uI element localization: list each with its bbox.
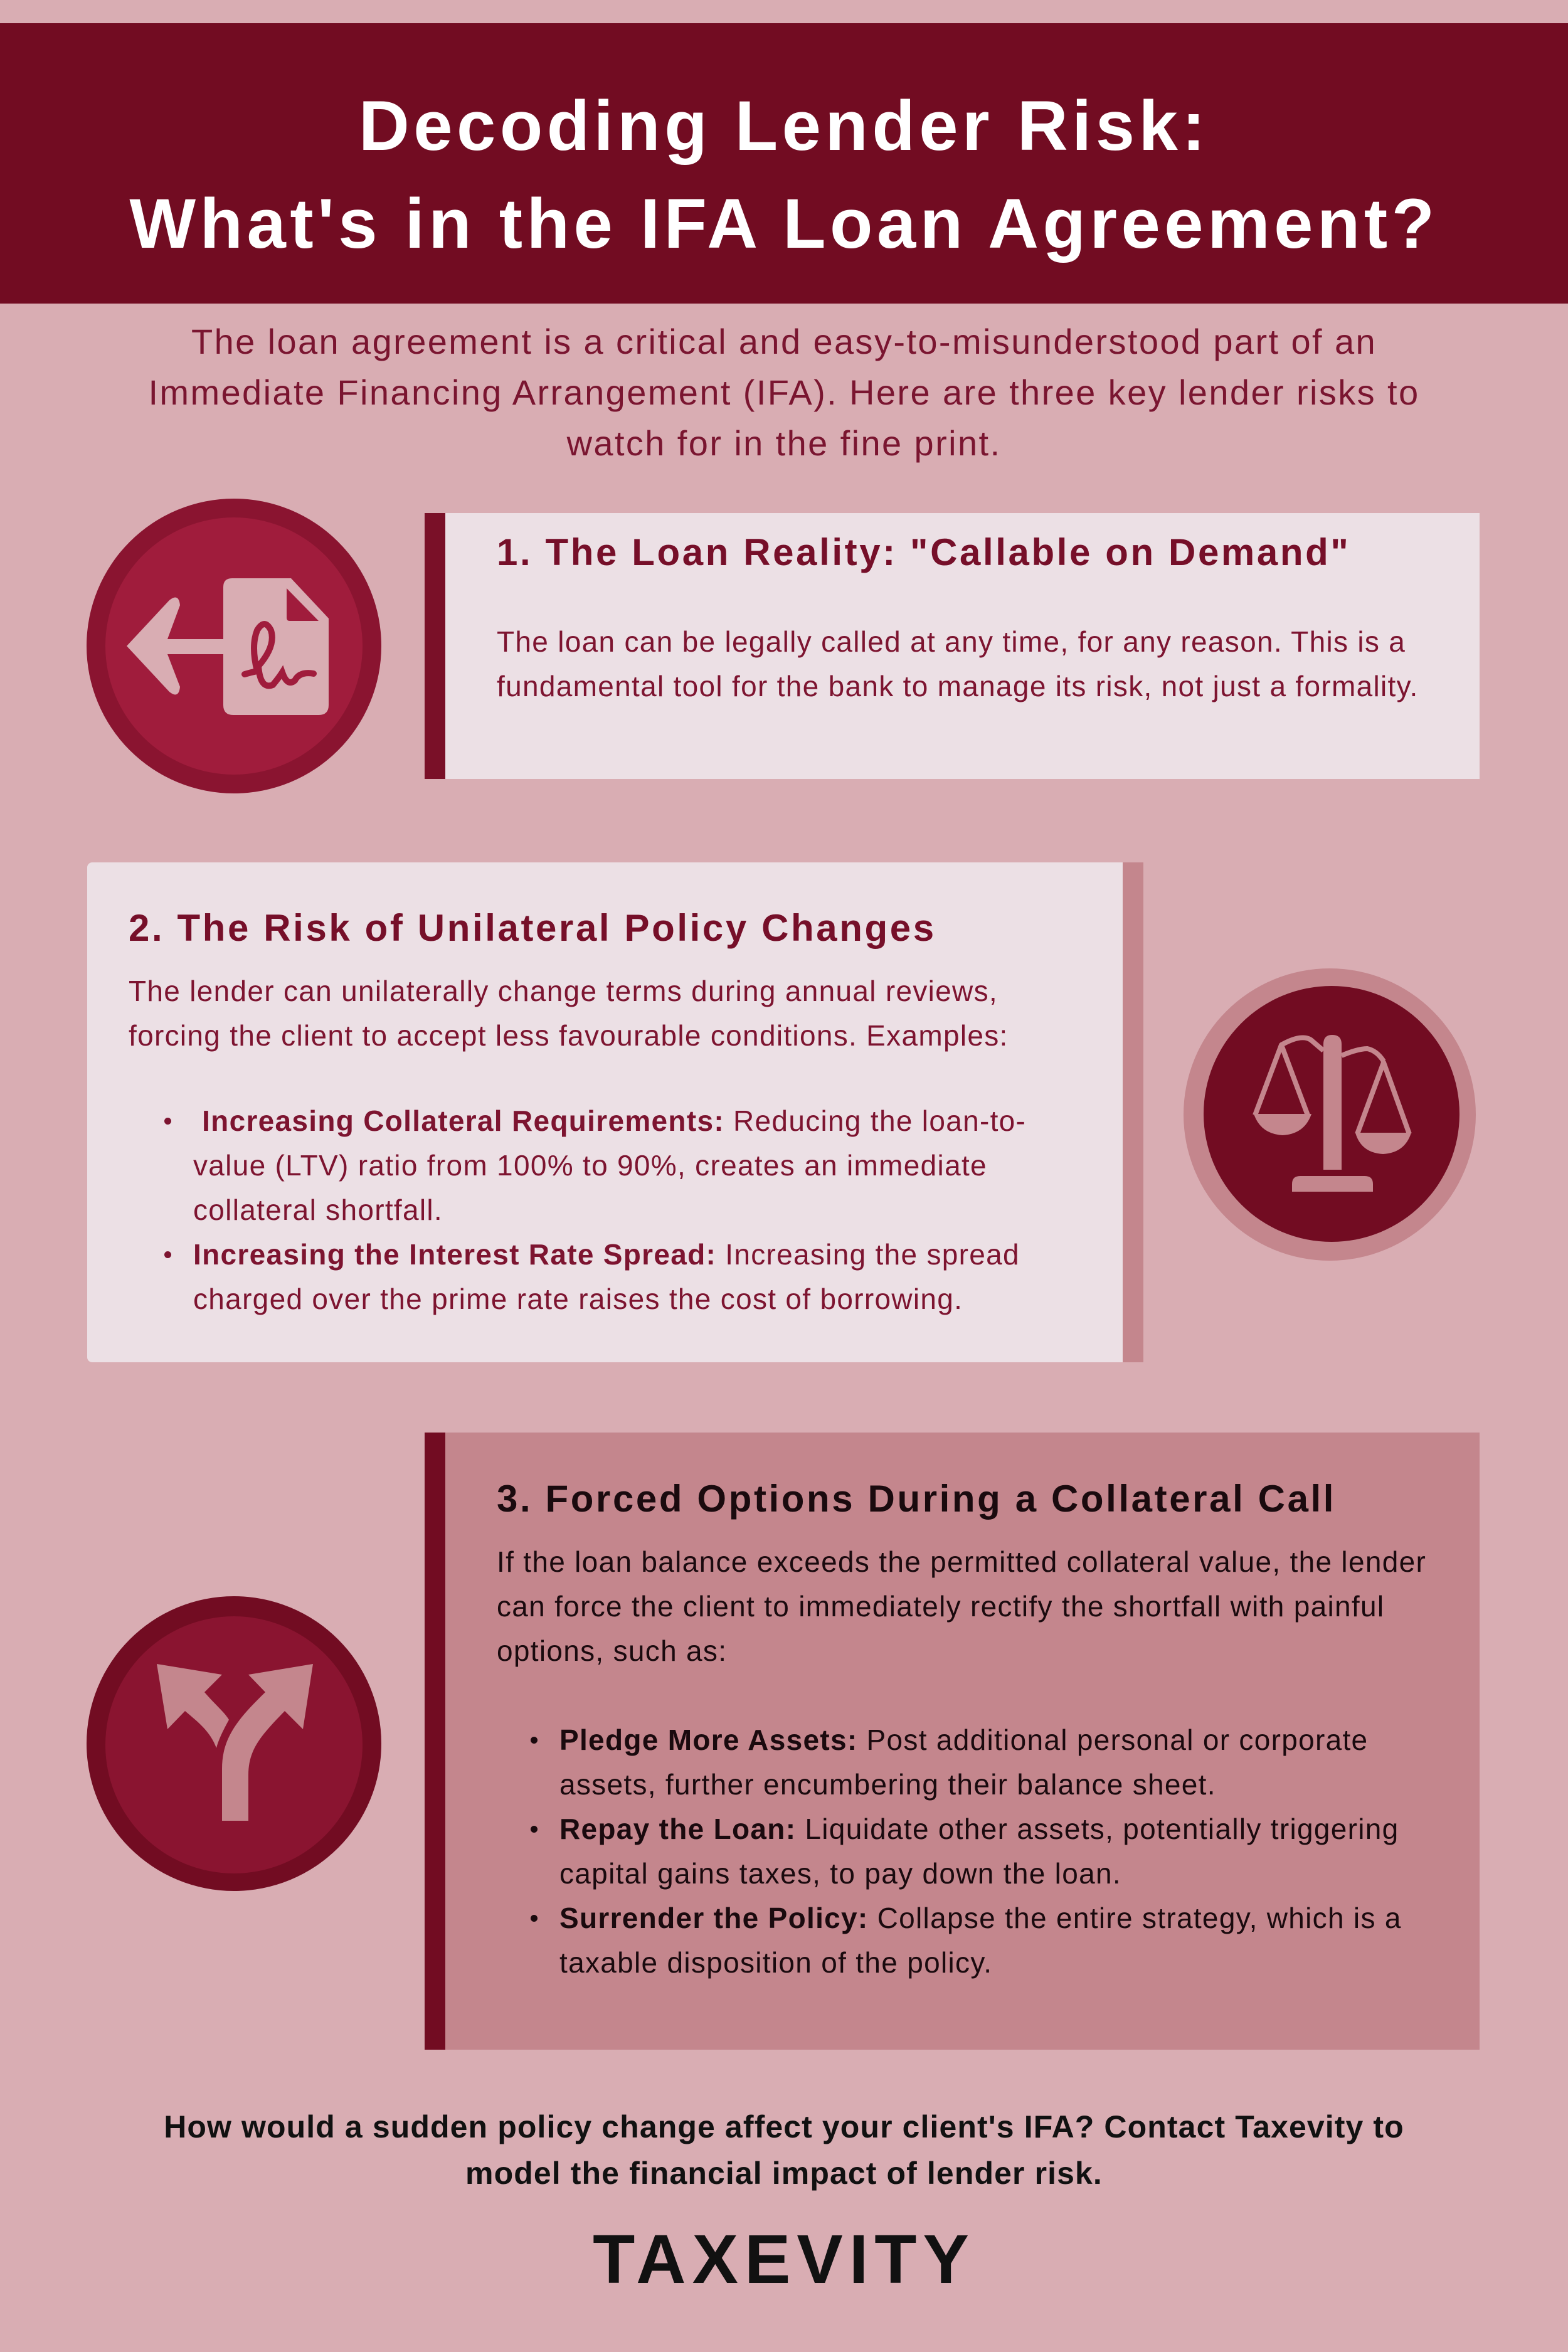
bullets 3: assets, further encumbering their balance sheet. <box>559 1768 1216 1801</box>
bullets 3 <box>531 1724 1402 1979</box>
bullets 3: Pledge More Assets: Post additional personal or corporate <box>559 1724 1368 1756</box>
footer call to action: How would a sudden policy change affect your client's IFA? Contact Taxevity to <box>164 2109 1404 2144</box>
intro text <box>148 322 1420 463</box>
title <box>129 87 1439 263</box>
panel: 3 forced options <box>425 1433 1480 2050</box>
logo: TAXEVITY: TAXEVITY <box>593 2221 975 2298</box>
header band <box>0 23 1568 304</box>
body 1: fundamental tool for the bank to manage its risk, not just a formality. <box>497 670 1419 702</box>
body 2 <box>129 975 1009 1052</box>
body 3: can force the client to immediately rectify the shortfall with painful <box>497 1590 1384 1623</box>
bullets 3: taxable disposition of the policy. <box>559 1946 992 1979</box>
body 1: The loan can be legally called at any time, for any reason. This is a <box>497 625 1406 658</box>
icon: signed document with arrow <box>87 499 381 793</box>
footer call to action <box>164 2109 1404 2191</box>
intro text: Immediate Financing Arrangement (IFA). Here are three key lender risks to <box>148 373 1420 412</box>
bullets 2: Increasing the Interest Rate Spread: Increasing the spread <box>193 1238 1020 1271</box>
bullets 2: Increasing Collateral Requirements: Reducing the loan-to- <box>202 1104 1026 1137</box>
footer call to action: model the financial impact of lender risk. <box>465 2156 1103 2191</box>
heading 1: 1. The Loan Reality: "Callable on Demand" <box>497 531 1350 573</box>
body 2: The lender can unilaterally change terms during annual reviews, <box>129 975 998 1007</box>
body 2: forcing the client to accept less favourable conditions. Examples: <box>129 1019 1009 1052</box>
body 3: options, such as: <box>497 1634 727 1667</box>
bullets 3: Surrender the Policy: Collapse the entire strategy, which is a <box>559 1902 1402 1934</box>
body 3: If the loan balance exceeds the permitted collateral value, the lender <box>497 1545 1426 1578</box>
body 1 <box>497 625 1419 702</box>
icon: split arrows <box>87 1596 381 1891</box>
bullets 3: capital gains taxes, to pay down the loan. <box>559 1857 1121 1890</box>
panel: 2 unilateral policy changes <box>87 862 1143 1362</box>
intro text: watch for in the fine print. <box>567 423 1001 463</box>
bullets 2: collateral shortfall. <box>193 1194 443 1226</box>
heading 3: 3. Forced Options During a Collateral Call <box>497 1478 1336 1520</box>
bullets 2: charged over the prime rate raises the cost of borrowing. <box>193 1283 963 1315</box>
body 3 <box>497 1545 1426 1667</box>
icon: scales of justice <box>1184 968 1476 1261</box>
title: What's in the IFA Loan Agreement? <box>129 184 1439 263</box>
bullets 2: value (LTV) ratio from 100% to 90%, creates an immediate <box>193 1149 987 1182</box>
bullets 2 <box>164 1104 1026 1315</box>
intro text: The loan agreement is a critical and easy-to-misunderstood part of an <box>191 322 1377 361</box>
bullets 3: Repay the Loan: Liquidate other assets, potentially triggering <box>559 1813 1399 1845</box>
panel: 1 callable on demand <box>425 513 1480 779</box>
title: Decoding Lender Risk: <box>359 87 1209 165</box>
heading 2: 2. The Risk of Unilateral Policy Changes <box>129 907 936 949</box>
